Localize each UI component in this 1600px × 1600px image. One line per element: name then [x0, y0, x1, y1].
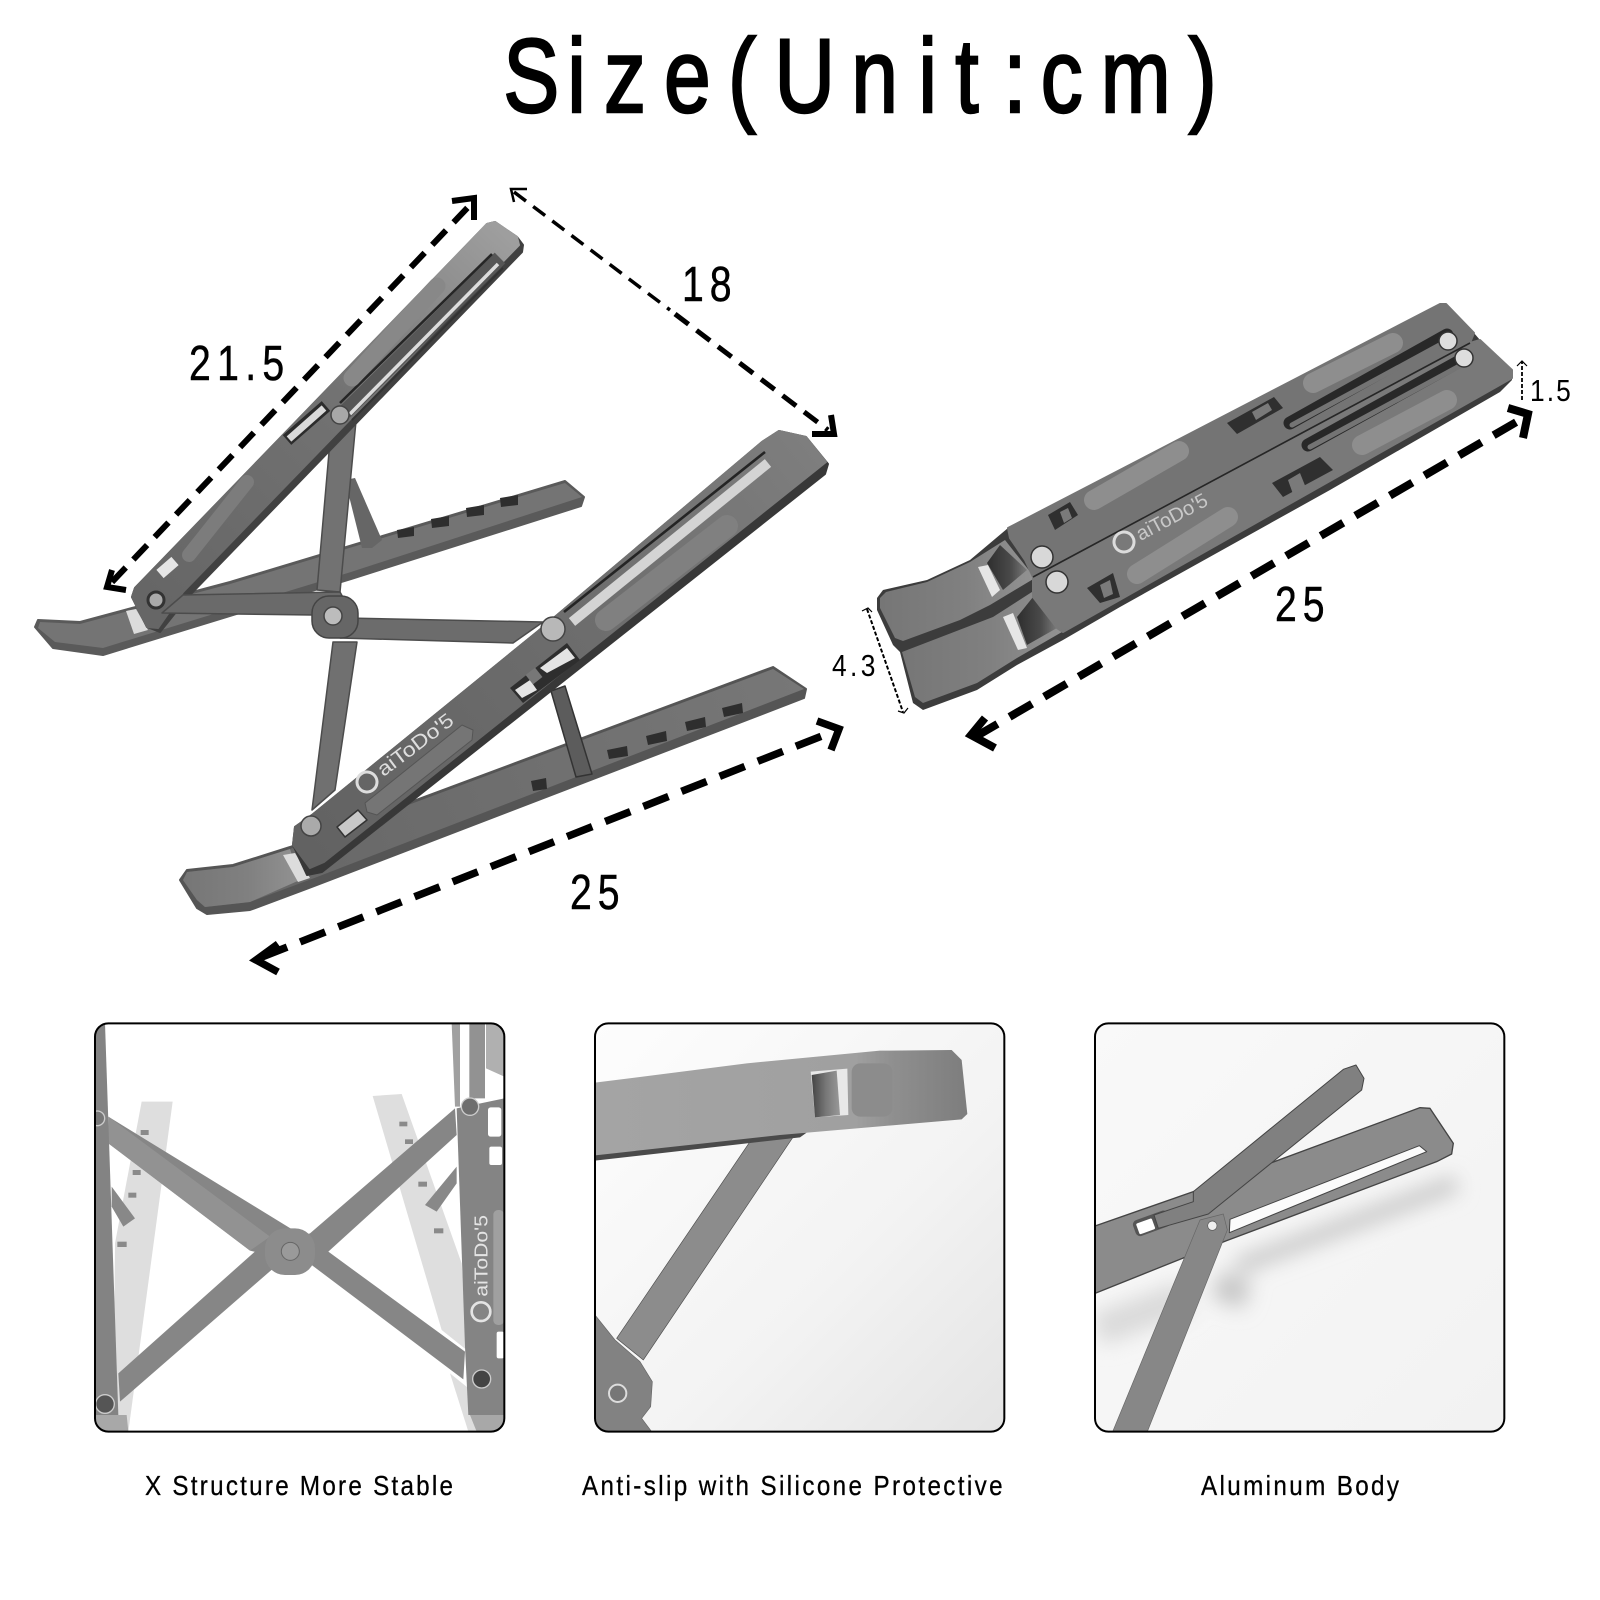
rear top arm: [132, 222, 523, 632]
panel: X structure: [90, 1023, 504, 1432]
front arm lower pad: [365, 725, 473, 815]
front support leg: [551, 686, 592, 777]
bar slot: [1229, 1146, 1427, 1233]
hinge rollers: [1060, 403, 1306, 598]
rear x-arm: [162, 592, 350, 615]
front arm upper pad: [606, 526, 727, 620]
stand logo: aiToDo'5: [373, 709, 458, 781]
panel logo: [471, 1215, 492, 1321]
silicone pad: [852, 1064, 882, 1116]
rear support leg: [345, 478, 382, 548]
front base bar: [180, 667, 806, 914]
foot notches: [978, 545, 1057, 650]
dimension arrow: 1.5 thickness: [1517, 361, 1527, 400]
hinge window: [510, 643, 580, 703]
panel logo: aiToDo'5: [471, 1215, 492, 1297]
hinge plate: [595, 1315, 652, 1432]
left column: [95, 1023, 118, 1415]
label: 21.5: 21.5: [189, 337, 284, 391]
panel: aluminum body: [1095, 1023, 1504, 1432]
caption: silicone: Anti-slip with Silicone Protective: [582, 1472, 1003, 1501]
rear arm slot: [340, 254, 503, 420]
caption: aluminum: Aluminum Body: [1201, 1472, 1399, 1501]
rear base bar: [35, 481, 584, 655]
folded arm: [1154, 1065, 1364, 1228]
rear bar holes: [117, 1122, 443, 1247]
label: 1.5: 1.5: [1530, 374, 1571, 409]
open laptop stand photo: [35, 222, 828, 914]
upper plate: [1008, 304, 1474, 577]
dimension arrow: 25 open width: [256, 721, 839, 972]
dimension arrow: 18 depth: [511, 189, 834, 434]
front arm slot: [572, 463, 768, 622]
arm shadow edge: [595, 1133, 807, 1161]
label: 4.3: 4.3: [832, 649, 875, 684]
arm bar: [595, 1050, 967, 1155]
silicone pads: [1094, 343, 1447, 574]
rear vertical strut: [317, 418, 356, 592]
dimension arrow: 4.3 width: [862, 608, 908, 713]
label: 18: 18: [682, 258, 732, 312]
lower arm pin: [1208, 1221, 1217, 1230]
rivet: [609, 1385, 626, 1402]
rivets: [90, 1098, 491, 1413]
lower foot: [902, 590, 1062, 703]
x pivot: [272, 1228, 312, 1275]
folded body shadow edge: [877, 304, 1512, 710]
right column lower: [457, 1098, 504, 1415]
front vertical strut: [312, 642, 357, 810]
left window: [1132, 1210, 1168, 1236]
lower arm: [1113, 1214, 1227, 1432]
dimension arrow: 21.5 height: [107, 198, 474, 590]
roller window: [811, 1069, 848, 1117]
side braces: [112, 1167, 457, 1227]
hinge windows: [1048, 397, 1333, 603]
x arm bottom left to top right: [118, 1108, 457, 1402]
label: 25 folded: 25: [1275, 578, 1325, 632]
front top arm: [293, 431, 828, 875]
folded laptop stand photo: [877, 304, 1512, 710]
front x-arm: [340, 618, 543, 643]
x arm top left to bottom right: [108, 1117, 465, 1379]
dimension arrow: 25 folded length: [971, 408, 1528, 748]
folded logo: [1110, 490, 1212, 557]
slots and pins: [1031, 332, 1473, 593]
stand logo: [352, 709, 458, 797]
folded logo: aiToDo'5: [1133, 490, 1212, 546]
soft shadows: [1097, 1183, 1457, 1330]
right column windows: [488, 1107, 504, 1358]
caption: X structure: X Structure More Stable: [145, 1472, 453, 1501]
x-arm pivot: [312, 596, 358, 638]
pale rear base bars: [113, 1094, 490, 1432]
lower corners: [95, 1415, 504, 1432]
right column upper: [452, 1023, 504, 1107]
panel: silicone protective: [595, 1023, 1004, 1432]
upper foot: [880, 540, 1035, 641]
long bar: [1095, 1108, 1453, 1293]
lower plate: [1033, 340, 1512, 632]
label: 25 open: 25: [570, 866, 620, 920]
strut: [617, 1137, 793, 1360]
title: Size(Unit:cm): [503, 18, 1217, 135]
seam line: [1033, 343, 1470, 577]
